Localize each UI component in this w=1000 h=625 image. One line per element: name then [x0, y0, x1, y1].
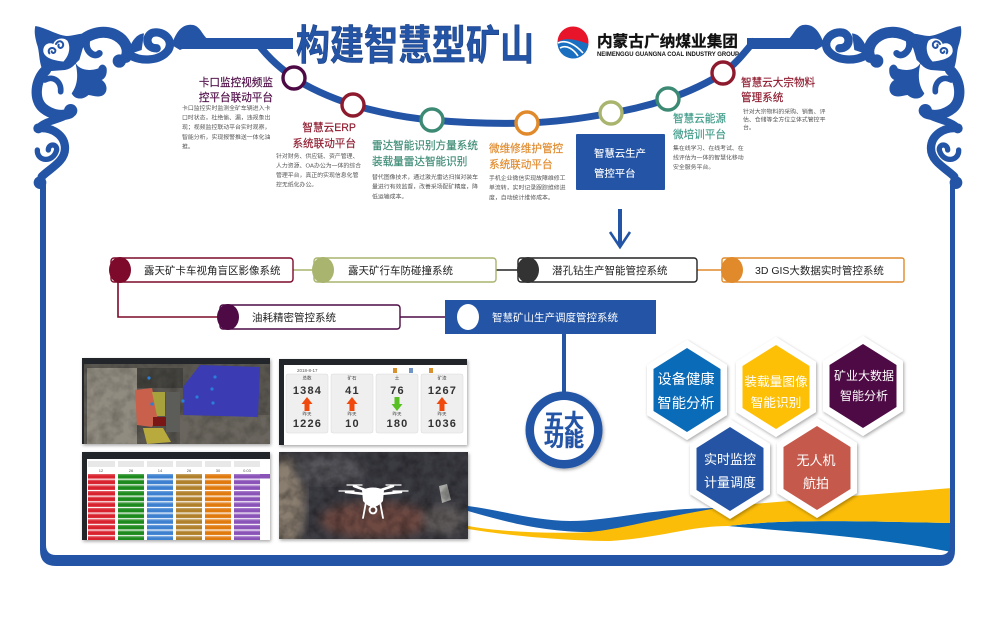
hexagon: real-time monitoring	[690, 419, 770, 519]
title: 构建智慧型矿山	[296, 11, 534, 71]
text block: ERP: 针对财务、供应链、资产管理、	[276, 152, 358, 160]
text block: checkpoint monitoring: 智能分析，实现报警推送一体化油	[182, 133, 270, 141]
text block: maintenance: 手机企业微信实现故障维修工	[489, 174, 566, 182]
screenshot: tonnage dashboard: 1226	[293, 418, 322, 430]
system bar: anti-collision: 露天矿行车防碰撞系统	[348, 264, 453, 277]
text block: bulk material: 管理系统	[741, 91, 784, 104]
text block: checkpoint monitoring: 控平台联动平台	[199, 91, 273, 104]
system bar: fuel	[217, 304, 400, 330]
company name english: NEIMENGGU GUANGNA COAL INDUSTRY GROUP	[597, 52, 739, 58]
hexagon: load image recognition: 智能识别	[751, 396, 801, 410]
system bar: 3D GIS: 3D GIS大数据实时管控系统	[755, 264, 884, 277]
text block: bulk material	[741, 76, 826, 132]
system bar: fuel: 油耗精密管控系统	[252, 311, 336, 324]
screenshot: tonnage dashboard: 土	[395, 374, 400, 380]
logo emblem	[557, 26, 588, 59]
text block: radar: 量进行有效监督，改善采场配矿精度，降	[372, 183, 478, 191]
hexagon: load image recognition	[736, 337, 816, 437]
icon: drone	[339, 485, 408, 518]
text block: checkpoint monitoring	[182, 76, 273, 150]
screenshot: tonnage dashboard: 10	[345, 418, 360, 430]
text block: bulk material: 智慧云大宗物料	[741, 76, 816, 89]
screenshot: shift table: 14	[158, 468, 163, 473]
hexagon: mining big data: 智能分析	[840, 388, 888, 403]
corner ornament right	[789, 25, 963, 189]
screenshot: tonnage dashboard: 昨天	[392, 410, 402, 418]
hexagon: drone aerial	[777, 418, 857, 518]
screenshot: tonnage dashboard: 76	[390, 385, 405, 397]
text block: energy training: 安全服务平台。	[673, 163, 714, 171]
screenshot: tonnage dashboard: 41	[345, 385, 360, 397]
text block: energy training: 智慧云能源	[673, 112, 726, 125]
screenshot: shift table	[82, 452, 270, 540]
text block: radar: 装载量雷达智能识别	[372, 155, 467, 168]
text block: maintenance	[489, 142, 566, 201]
system bar: drilling	[517, 257, 697, 283]
badge: five functions: 功能	[544, 423, 584, 452]
hexagon: equipment health: 智能分析	[657, 395, 715, 412]
text block: maintenance: 微维修维护管控	[489, 142, 564, 155]
text block: checkpoint monitoring: 现；视频监控联动平台实时观察，	[182, 123, 270, 131]
hexagon: equipment health: 设备健康	[657, 371, 715, 388]
text block: maintenance: 度，自动统计维修成本。	[489, 193, 554, 201]
hexagon: mining big data	[823, 336, 903, 436]
bottom waves	[468, 488, 952, 552]
text block: ERP: 控无纸化办公。	[276, 180, 317, 188]
panel: production control platform	[576, 134, 665, 190]
text block: bulk material: 台。	[743, 124, 755, 132]
badge: five functions	[526, 392, 602, 468]
text block: ERP: 管理平台，真正的实现信息化管	[276, 171, 359, 179]
screenshot: map	[82, 358, 270, 444]
text block: bulk material: 估、仓储等全方位立体式管控平	[743, 116, 826, 124]
system bar: 3D GIS	[721, 257, 904, 283]
connectors	[118, 270, 721, 395]
top bar left	[180, 38, 293, 49]
hexagon: real-time monitoring: 计量调度	[704, 475, 756, 490]
arrow down	[610, 209, 630, 247]
text block: energy training	[673, 112, 744, 171]
text block: ERP: 人力资源、OA办公为一体的综合	[276, 162, 361, 170]
screenshot: shift table: 26	[187, 468, 192, 473]
hexagon: equipment health	[647, 340, 727, 440]
text block: energy training: 集在线学习、在线考试、在	[673, 144, 744, 152]
hexagon: real-time monitoring: 实时监控	[704, 452, 756, 467]
text block: radar: 低运输成本。	[372, 192, 407, 200]
screenshot: tonnage dashboard: 2018-8-17	[297, 368, 318, 373]
text block: ERP	[276, 121, 361, 188]
text block: checkpoint monitoring: 推。	[182, 142, 194, 150]
screenshot: tonnage dashboard: 180	[387, 418, 408, 430]
logo	[557, 26, 739, 59]
screenshot: tonnage dashboard: 昨天	[348, 410, 357, 418]
system bar: anti-collision	[312, 257, 496, 283]
screenshot: tonnage dashboard: 昨天	[302, 410, 312, 418]
hexagon: drone aerial: 无人机	[796, 453, 836, 468]
text block: radar	[372, 139, 478, 200]
timeline curve	[258, 40, 755, 123]
text block: checkpoint monitoring: 卡口监控实时监测全矿车辆进入卡	[182, 104, 270, 112]
text block: ERP: 智慧云ERP	[302, 121, 356, 134]
panel: production control platform: 管控平台	[594, 167, 636, 180]
screenshot: shift table: 0.03	[243, 468, 252, 473]
panel: production control platform: 智慧云生产	[594, 147, 646, 160]
text block: checkpoint monitoring: 卡口监控视频监	[199, 76, 273, 89]
hexagon: drone aerial: 航拍	[803, 476, 829, 491]
text block: ERP: 系统联动平台	[292, 137, 356, 150]
screenshot: shift table: 30	[216, 468, 221, 473]
text block: radar: 替代图像技术，通过激光雷达扫描对装车	[372, 173, 478, 181]
screenshot: tonnage dashboard: 矿渣	[438, 374, 447, 382]
text block: energy training: 微培训平台	[673, 128, 726, 141]
screenshot: tonnage dashboard: 昨天	[438, 410, 447, 418]
frame border	[40, 185, 955, 566]
text block: radar: 雷达智能识别方量系统	[372, 139, 478, 152]
system bar: dispatch	[445, 300, 656, 334]
text block: bulk material: 针对大宗物料的采购、销售、评	[743, 108, 826, 116]
screenshot: tonnage dashboard: 1267	[428, 385, 457, 397]
system bar: truck blind spot: 露天矿卡车视角盲区影像系统	[144, 264, 281, 277]
hexagon: mining big data: 矿业大数据	[834, 368, 894, 383]
system bar: dispatch: 智慧矿山生产调度管控系统	[492, 311, 618, 324]
screenshot: shift table: 12	[99, 468, 104, 473]
text block: checkpoint monitoring: 口时状态，杜绝偷、漏，违规象出	[182, 114, 270, 122]
screenshot: tonnage dashboard: 总数	[302, 374, 312, 382]
station markers	[283, 62, 734, 134]
corner ornament left	[33, 25, 207, 189]
screenshot: shift table: 26	[129, 468, 134, 473]
screenshot: tonnage dashboard	[279, 359, 467, 445]
top bar right	[747, 38, 815, 49]
screenshot: tonnage dashboard: 1036	[428, 418, 457, 430]
text block: energy training: 线评估为一体的智慧化移动	[673, 154, 744, 162]
badge: five functions: 五大	[544, 405, 584, 434]
hexagon: load image recognition: 装载量图像	[744, 375, 808, 389]
system bar: truck blind spot	[109, 257, 293, 283]
text block: maintenance: 单流转，实时记录跟踪维修进	[489, 184, 566, 192]
screenshot: drone aerial photo	[265, 452, 468, 553]
text block: maintenance: 系统联动平台	[489, 158, 553, 171]
screenshot: tonnage dashboard: 1384	[293, 385, 322, 397]
system bar: drilling: 潜孔钻生产智能管控系统	[552, 264, 668, 277]
company name: 内蒙古广纳煤业集团	[597, 32, 738, 50]
screenshot: tonnage dashboard: 矿石	[348, 374, 357, 382]
